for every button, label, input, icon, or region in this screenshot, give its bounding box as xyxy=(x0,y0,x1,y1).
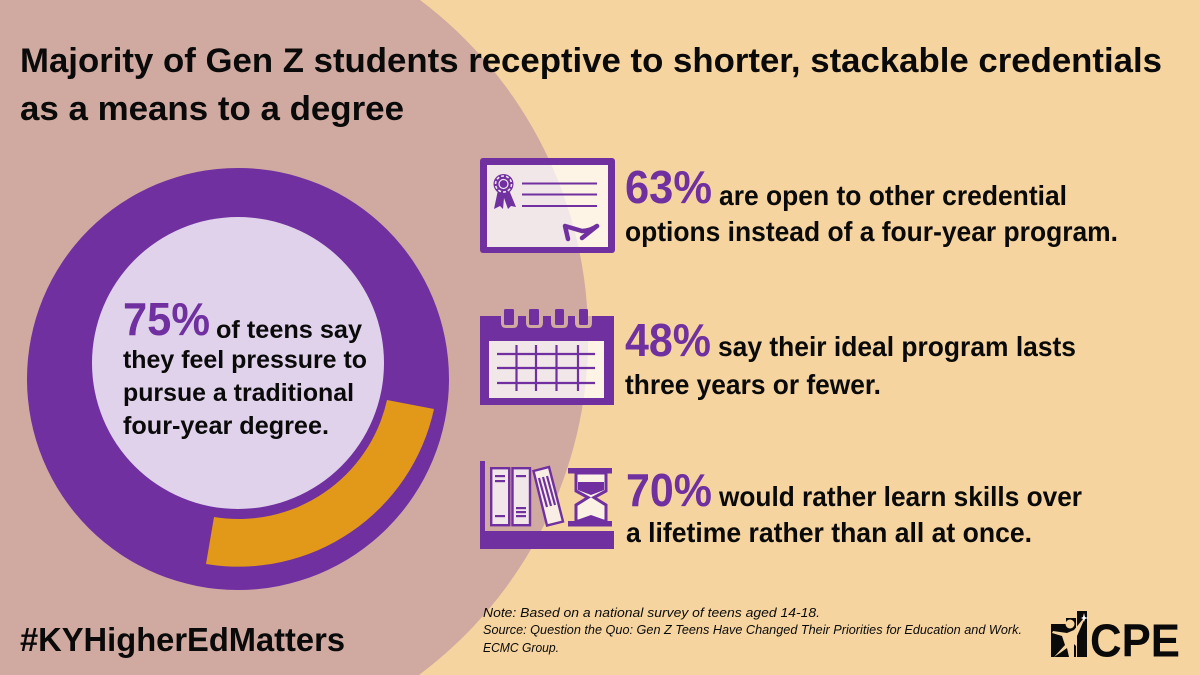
hashtag: #KYHigherEdMatters xyxy=(20,621,345,658)
shelf xyxy=(480,461,614,549)
title xyxy=(20,42,1162,128)
stat: 48%: say their ideal program lasts xyxy=(718,331,1076,362)
book 3 xyxy=(534,467,563,526)
stat: 70%: a lifetime rather than all at once. xyxy=(626,517,1032,548)
donut statement: they feel pressure to xyxy=(123,346,367,374)
donut statement xyxy=(123,293,367,440)
stat: 63%: options instead of a four-year program. xyxy=(625,216,1118,247)
logo mark xyxy=(1051,611,1088,657)
stat: 48%: 48% xyxy=(625,314,711,366)
stat: 63%: are open to other credential xyxy=(719,180,1067,211)
stat: 63%: 63% xyxy=(625,161,712,213)
source note: Source: Question the Quo: Gen Z Teens Have Changed Their Priorities for Education and Work. xyxy=(483,623,1022,637)
signature xyxy=(565,226,597,239)
certificate lines xyxy=(522,184,597,206)
title: as a means to a degree xyxy=(20,90,404,128)
rosette xyxy=(494,174,516,209)
donut statement: of teens say xyxy=(216,316,362,344)
stat: 70%: 70% xyxy=(626,464,712,516)
book 1 xyxy=(491,468,509,525)
donut statement: four-year degree. xyxy=(123,412,329,440)
icon: certificate xyxy=(480,158,615,253)
icon: calendar xyxy=(480,309,614,405)
stat: 70%: would rather learn skills over xyxy=(718,481,1082,512)
source note: Note: Based on a national survey of teens aged 14-18. xyxy=(483,605,820,620)
donut statement: pursue a traditional xyxy=(123,379,354,407)
source note xyxy=(483,605,1022,655)
stat: 48% xyxy=(625,314,1076,400)
calendar grid xyxy=(497,345,595,391)
icon: books and hourglass xyxy=(480,461,614,549)
amber donut segment xyxy=(206,400,434,567)
source note: ECMC Group. xyxy=(483,641,559,655)
book 2 xyxy=(512,468,530,525)
donut centre xyxy=(92,217,384,509)
stat: 70% xyxy=(626,464,1082,548)
stat: 63% xyxy=(625,161,1118,247)
donut chart xyxy=(27,168,449,590)
title: Majority of Gen Z students receptive to shorter, stackable credentials xyxy=(20,42,1162,80)
logo: CPE: CPE xyxy=(1090,614,1180,666)
calendar rings xyxy=(501,309,592,328)
donut statement: 75% xyxy=(123,293,210,345)
logo: CPE xyxy=(1051,611,1180,666)
hourglass xyxy=(568,468,612,526)
stat: 48%: three years or fewer. xyxy=(625,369,881,400)
